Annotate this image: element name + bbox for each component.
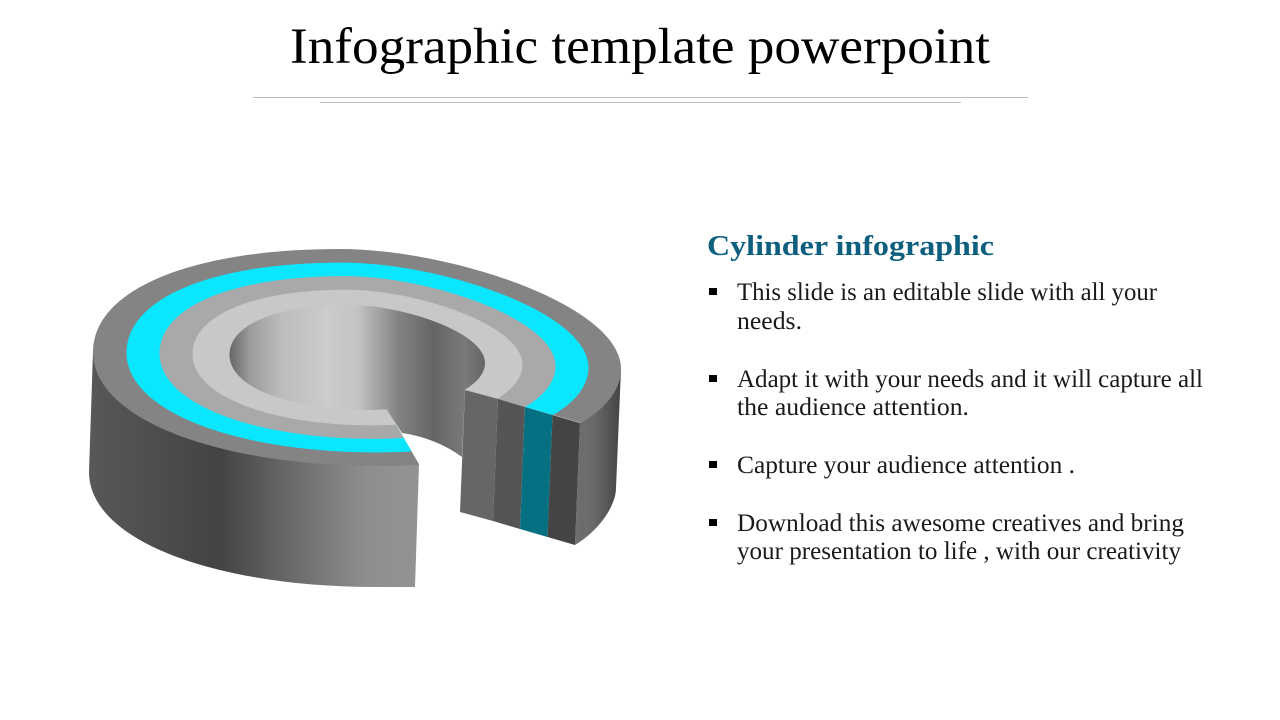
inner hole wall bbox=[230, 305, 485, 457]
bullet 2: the audience attention. bbox=[737, 394, 969, 421]
bullet 2: Adapt it with your needs and it will capture all bbox=[737, 366, 1203, 393]
bullet 1: needs. bbox=[737, 308, 802, 335]
outer wall: right section bbox=[575, 350, 621, 545]
title: Infographic template powerpoint bbox=[290, 19, 990, 75]
top face rings bbox=[93, 249, 621, 466]
outer wall: left section bbox=[89, 300, 419, 587]
bullet 4: your presentation to life , with our creativity bbox=[737, 538, 1181, 565]
heading: Cylinder infographic bbox=[707, 230, 994, 262]
cylinder infographic bbox=[89, 249, 621, 587]
bullet 2 bbox=[709, 366, 1203, 421]
cut face stripes bbox=[460, 390, 580, 545]
bullet 4 bbox=[709, 510, 1184, 565]
bullet 4: Download this awesome creatives and bring bbox=[737, 510, 1184, 537]
bullet 1: This slide is an editable slide with all your bbox=[737, 279, 1158, 306]
panel: text bbox=[707, 230, 1203, 565]
bullet 3: Capture your audience attention . bbox=[737, 452, 1075, 479]
title underlines bbox=[253, 97, 1028, 103]
bullet 1 bbox=[709, 279, 1158, 335]
